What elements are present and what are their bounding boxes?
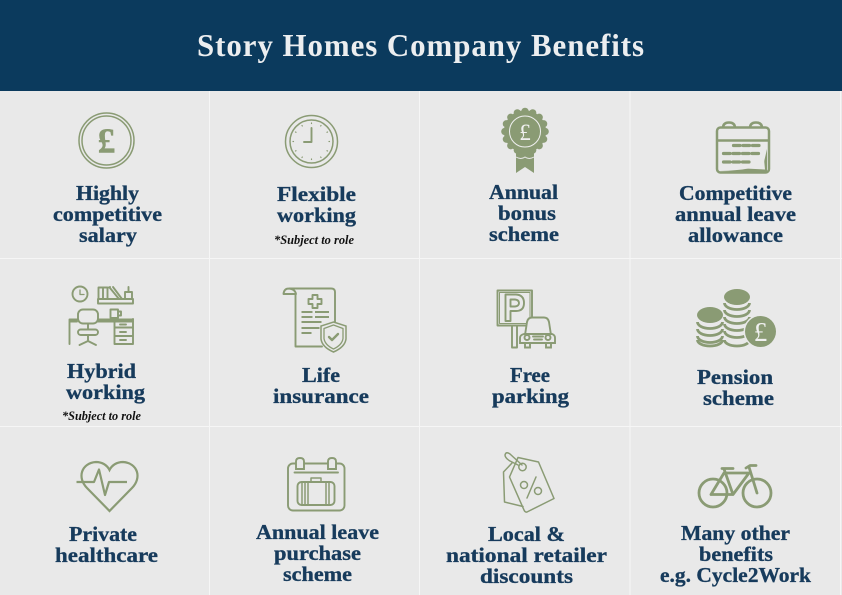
- panel: competitive annual leave allowance: [675, 122, 796, 247]
- heading: annual bonus scheme: Annual: [489, 180, 558, 204]
- heading: life insurance: [273, 363, 369, 408]
- icon: home office desk: [70, 286, 133, 345]
- heading: many other benefits: Many other: [681, 521, 790, 545]
- heading: local and national retailer discounts: discounts: [480, 564, 573, 588]
- heading: highly competitive salary: salary: [79, 223, 137, 247]
- panel: hybrid working: [62, 286, 145, 423]
- heading: flexible working: working: [277, 203, 356, 227]
- heading: highly competitive salary: competitive: [53, 202, 162, 226]
- heading: free parking: parking: [492, 384, 569, 408]
- panel: annual bonus scheme: [489, 108, 559, 246]
- heading: highly competitive salary: [53, 181, 162, 247]
- heading: local and national retailer discounts: Local &: [488, 522, 565, 546]
- heading: competitive annual leave allowance: Competitive: [679, 181, 792, 205]
- icon: calendar with suitcase: [288, 458, 344, 510]
- heading: pension scheme: Pension: [697, 365, 773, 389]
- heading: pension scheme: scheme: [703, 386, 774, 410]
- heading: flexible working: Flexible: [277, 182, 356, 206]
- heading: pension scheme: [697, 365, 774, 410]
- icon: desk calendar: [717, 122, 769, 172]
- heading: flexible working: [277, 182, 356, 227]
- panel: local and national retailer discounts: [446, 453, 607, 588]
- panel: highly competitive salary: [53, 113, 162, 247]
- heading: annual leave purchase scheme: scheme: [283, 562, 352, 586]
- heading: annual leave purchase scheme: [256, 520, 379, 586]
- heading: local and national retailer discounts: national retailer: [446, 543, 607, 567]
- heading: local and national retailer discounts: [446, 522, 607, 588]
- heading: annual leave purchase scheme: purchase: [274, 541, 361, 565]
- note: subject to role: *Subject to role: [62, 409, 141, 423]
- heading: private healthcare: healthcare: [55, 543, 158, 567]
- icon: coin stacks: £: [754, 317, 767, 347]
- heading: competitive annual leave allowance: annual leave: [675, 202, 796, 226]
- note: subject to role: *Subject to role: [274, 233, 354, 247]
- icon: pound coin: £: [98, 122, 115, 160]
- heading: life insurance: insurance: [273, 384, 369, 408]
- heading: many other benefits: benefits: [699, 542, 773, 566]
- heading: many other benefits: [660, 521, 811, 587]
- header banner: [0, 0, 842, 91]
- heading: free parking: Free: [510, 363, 550, 387]
- heading: annual bonus scheme: [489, 180, 559, 246]
- icon: price tags: [504, 453, 554, 512]
- panel: free parking: [492, 290, 569, 408]
- icon: rosette badge: £: [519, 120, 531, 145]
- heading: many other benefits: e.g. Cycle2Work: [660, 563, 811, 587]
- heading: competitive annual leave allowance: [675, 181, 796, 247]
- panel: many other benefits: [660, 466, 811, 587]
- heading: free parking: [492, 363, 569, 408]
- heading: highly competitive salary: Highly: [76, 181, 139, 205]
- heading: hybrid working: Hybrid: [67, 359, 136, 383]
- panel: pension scheme: [697, 289, 778, 410]
- icon: parking sign and car: [498, 290, 555, 348]
- panel: life insurance: [273, 288, 369, 408]
- panel: annual leave purchase scheme: [256, 458, 379, 586]
- heading: hybrid working: working: [66, 380, 145, 404]
- icon: heart with pulse: [76, 462, 138, 511]
- heading: annual bonus scheme: scheme: [489, 222, 559, 246]
- title: Story Homes Company Benefits: [197, 27, 645, 63]
- heading: private healthcare: Private: [69, 522, 137, 546]
- heading: private healthcare: [55, 522, 158, 567]
- panel: flexible working: [274, 116, 356, 247]
- heading: annual bonus scheme: bonus: [498, 201, 556, 225]
- icon: clock: [286, 116, 338, 168]
- heading: annual leave purchase scheme: Annual leave: [256, 520, 379, 544]
- heading: hybrid working: [66, 359, 145, 404]
- panel: private healthcare: [55, 462, 158, 567]
- icon: bicycle: [699, 466, 771, 507]
- heading: life insurance: Life: [302, 363, 340, 387]
- heading: competitive annual leave allowance: allowance: [688, 223, 783, 247]
- icon: policy document with shield: [284, 288, 346, 352]
